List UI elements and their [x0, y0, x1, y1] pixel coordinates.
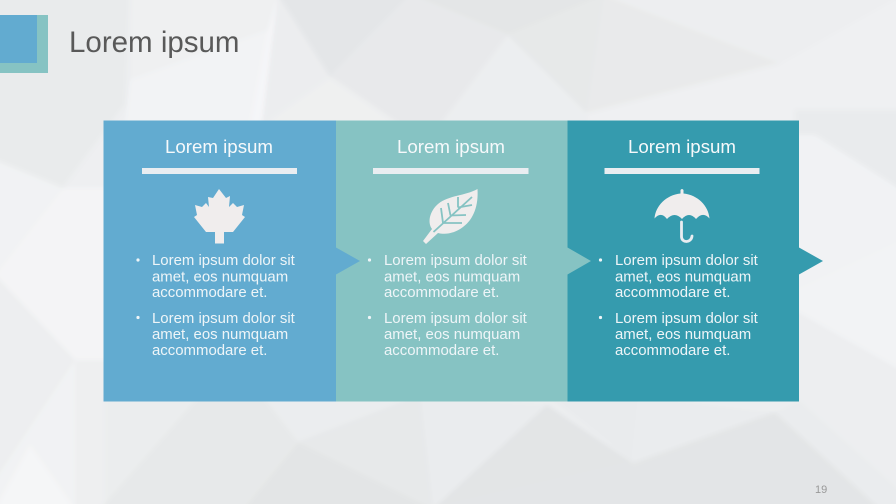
column 3 text — [599, 252, 759, 359]
column 3 text: Lorem ipsum dolor sit — [615, 252, 759, 269]
icon: maple leaf — [194, 189, 245, 244]
column 3 heading: Lorem ipsum — [628, 136, 736, 157]
column 3 divider — [604, 168, 760, 174]
column 1 text — [136, 252, 296, 359]
column 3 text: accommodare et. — [615, 284, 730, 301]
panel: column 2 — [336, 120, 568, 402]
icon: leaf — [423, 189, 478, 244]
column 2 text: accommodare et. — [384, 342, 499, 359]
arrow: column 3 outward — [799, 248, 823, 274]
column 2 divider — [373, 168, 528, 174]
column 2 text: amet, eos numquam — [384, 326, 520, 343]
column 1 text: amet, eos numquam — [152, 268, 288, 285]
column 2 heading: Lorem ipsum — [397, 136, 505, 157]
column 1 text: Lorem ipsum dolor sit — [152, 252, 296, 269]
icon: umbrella — [654, 189, 710, 242]
column 3 text: amet, eos numquam — [615, 326, 751, 343]
column 1 text: accommodare et. — [152, 284, 267, 301]
column 2 text: accommodare et. — [384, 284, 499, 301]
column 2 text: amet, eos numquam — [384, 268, 520, 285]
page number: 19 — [815, 484, 827, 496]
column 1 text: amet, eos numquam — [152, 326, 288, 343]
column 3 text: accommodare et. — [615, 342, 730, 359]
column 1 text: accommodare et. — [152, 342, 267, 359]
column 3 text: Lorem ipsum dolor sit — [615, 310, 759, 327]
column 1 divider — [142, 168, 297, 174]
column 3 text: amet, eos numquam — [615, 268, 751, 285]
title accent square — [0, 15, 48, 73]
column 1 heading: Lorem ipsum — [165, 136, 273, 157]
arrow: column 2 to 3 — [568, 248, 591, 274]
column 2 text: Lorem ipsum dolor sit — [384, 310, 528, 327]
column 2 text — [368, 252, 528, 359]
arrow: column 1 to 2 — [336, 248, 360, 274]
column 2 text: Lorem ipsum dolor sit — [384, 252, 528, 269]
panel: column 1 — [104, 120, 336, 402]
panel: column 3 — [568, 120, 823, 402]
title: Lorem ipsum — [69, 26, 240, 59]
column 1 text: Lorem ipsum dolor sit — [152, 310, 296, 327]
